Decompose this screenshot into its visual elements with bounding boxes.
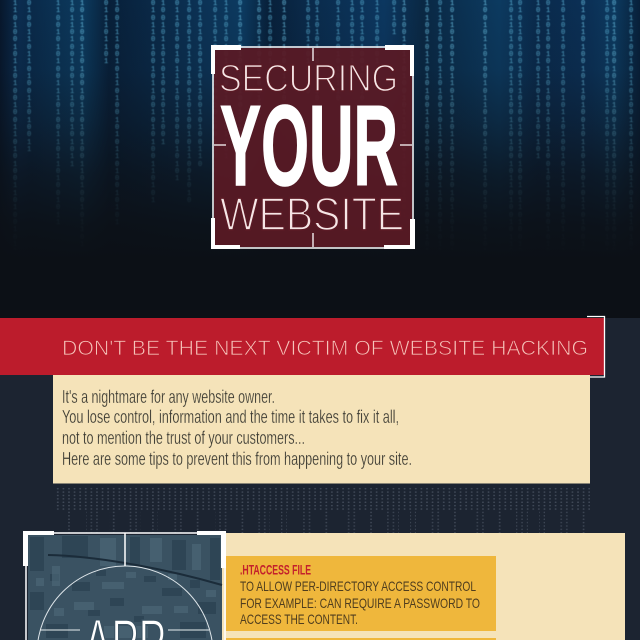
binary code rain: 1011001101001011010100110100101101 (80, 0, 84, 249)
binary code rain: 1001011010010 (306, 0, 310, 96)
binary code rain: 1100101010011101001101101001011 (56, 0, 60, 227)
binary code rain: 0101101001011001010100110101 (151, 0, 155, 205)
binary code rain: 01011010011010 (282, 0, 286, 103)
binary code rain: 1001110010110100101011010010101 (115, 0, 119, 227)
title block (211, 45, 415, 249)
title block: YOUR (220, 83, 398, 210)
binary code rain: 1011010010110100101101 (536, 0, 540, 161)
binary code rain: 10010110101001011001 (161, 0, 165, 147)
binary code rain: 1100101010100101101001 (224, 0, 228, 161)
red banner (0, 316, 604, 377)
red banner: DON'T BE THE NEXT VICTIM OF WEBSITE HACKING (62, 337, 588, 360)
intro text panel: It's a nightmare for any website owner. (62, 387, 275, 407)
binary code rain: 10110100101101001101001011010110101 (629, 0, 633, 250)
binary code rain: 01101001011010010110100110 (238, 0, 242, 190)
tip card: htaccess file: ACCESS THE CONTENT. (240, 611, 358, 627)
dot band gaps (55, 510, 590, 533)
binary code rain: 01101010010110010100110 (198, 0, 202, 169)
intro text panel: You lose control, information and the time it takes to fix it all, (62, 407, 399, 427)
binary dot band (55, 487, 590, 533)
binary code rain: 110100101 (375, 0, 379, 66)
binary code rain (12, 0, 634, 250)
tips panel background (222, 533, 625, 640)
intro text panel: not to mention the trust of your customers... (62, 428, 305, 448)
hero background (0, 0, 640, 318)
title block: SECURING (219, 58, 398, 100)
binary code rain: 10110100100111010101011 (70, 0, 74, 169)
tip card: htaccess file: .HTACCESS FILE (240, 562, 311, 578)
binary code rain: 1001011010100101 (257, 0, 261, 117)
binary code rain: 1011010011010010100110101 (213, 0, 217, 183)
intro text panel (53, 375, 590, 484)
binary code rain: 01101001010110 (336, 0, 340, 103)
binary code rain: 011101101 (104, 0, 108, 66)
binary code rain: 01101010011010 (315, 0, 319, 103)
tip card: htaccess file: FOR EXAMPLE: CAN REQUIRE A PASSWORD TO (240, 595, 480, 611)
binary code rain: 01101 (392, 0, 396, 37)
intro text panel: Here are some tips to prevent this from happening to your site. (62, 449, 412, 469)
binary code rain: 101001011010010110100101101001 (402, 0, 406, 220)
title block: WEBSITE (220, 188, 404, 240)
binary code rain: 110100101 (268, 0, 272, 66)
binary code rain: 0110100101101011001010101 (175, 0, 179, 183)
binary code rain: 10100101101 (350, 0, 354, 81)
next tip card (226, 638, 496, 640)
binary code rain: 01011010010110 (360, 0, 364, 103)
tip card: htaccess file (226, 556, 496, 631)
binary code rain: 1001010110100101001011001010 (187, 0, 191, 205)
hero fade to dark (0, 0, 640, 318)
tip card: htaccess file: TO ALLOW PER-DIRECTORY ACCESS CONTROL (240, 578, 476, 594)
photo panel: app section (23, 531, 226, 640)
binary code rain: 010011011010011010011 (27, 0, 31, 154)
